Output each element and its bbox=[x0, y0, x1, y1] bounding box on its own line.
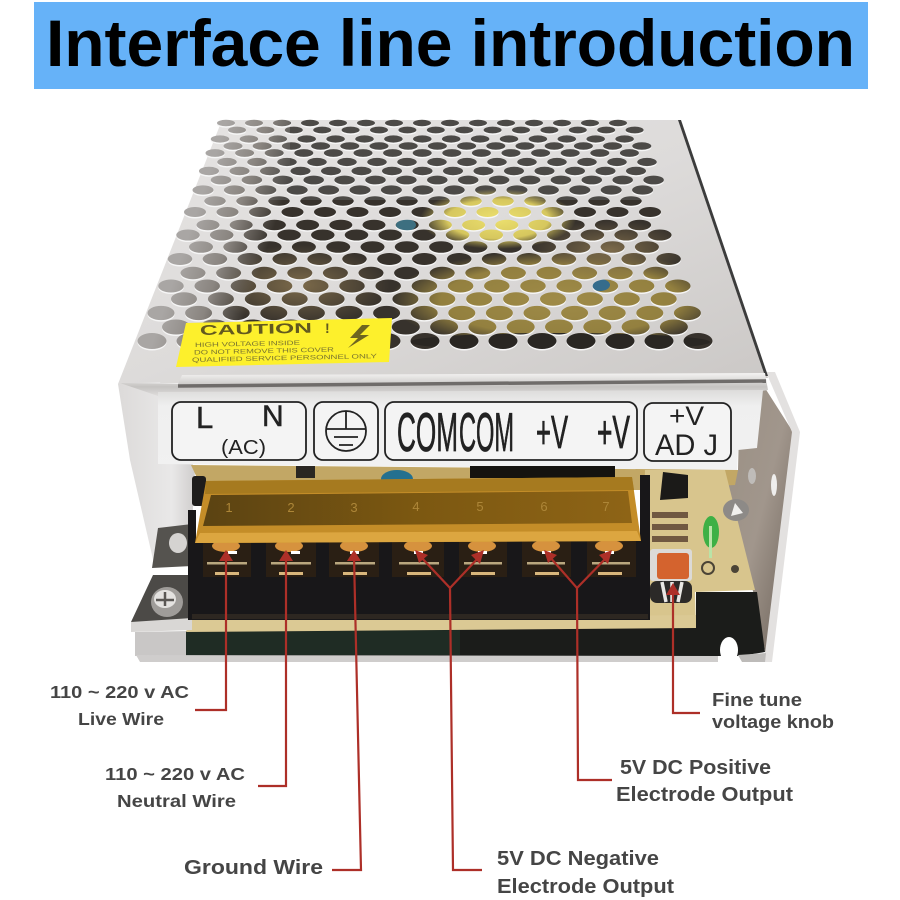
red pointer lines and arrows bbox=[195, 550, 700, 870]
panel: white terminal label strip bbox=[158, 390, 763, 470]
arrow: neutral wire bbox=[258, 550, 293, 786]
L N AC box: N bbox=[262, 400, 284, 433]
hole rim highlights bbox=[152, 124, 702, 342]
caution sticker: QUALIFIED SERVICE PERSONNEL ONLY bbox=[192, 353, 378, 364]
label: fine tune knob bbox=[712, 690, 834, 732]
title banner: Interface line introduction bbox=[46, 6, 855, 80]
panel: left side metal bbox=[118, 382, 195, 568]
label: live wire: Live Wire bbox=[78, 709, 164, 729]
perforation holes bbox=[138, 120, 712, 349]
+V ADJ box: +V bbox=[669, 401, 704, 431]
caution sticker: DO NOT REMOVE THIS COVER bbox=[194, 347, 335, 356]
label: live wire bbox=[50, 682, 189, 729]
amber terminal cover with numbers: 2 bbox=[287, 500, 295, 515]
panel: perforated top cover bbox=[118, 110, 768, 384]
amber terminal cover with numbers: 7 bbox=[602, 499, 610, 514]
COM and +V box: COM bbox=[459, 401, 514, 463]
COM and +V box: +V bbox=[597, 406, 630, 458]
transistor bbox=[660, 472, 688, 500]
amber terminal cover with numbers: 6 bbox=[540, 499, 548, 514]
arrow: positive output bbox=[544, 550, 612, 780]
label: live wire: 110 ~ 220 v AC bbox=[50, 682, 189, 702]
notch in base bbox=[720, 637, 738, 663]
black terminal block bbox=[188, 475, 650, 620]
ground symbol box bbox=[314, 402, 378, 460]
arrow: negative output bbox=[415, 550, 484, 870]
caution sticker: ! bbox=[325, 320, 330, 336]
label: fine tune knob: voltage knob bbox=[712, 712, 834, 732]
caution sticker: CAUTION bbox=[200, 320, 312, 338]
panel: right side wall bbox=[725, 372, 800, 662]
amber terminal cover with numbers: 3 bbox=[350, 500, 358, 515]
label: fine tune knob: Fine tune bbox=[712, 690, 802, 710]
L N AC box bbox=[172, 400, 306, 460]
caution sticker bbox=[176, 318, 392, 367]
label: positive output: 5V DC Positive bbox=[620, 756, 771, 779]
label: neutral wire: 110 ~ 220 v AC bbox=[105, 764, 245, 784]
L N AC box: L bbox=[196, 400, 213, 435]
screw terminals bbox=[203, 541, 636, 577]
bottom base plate bbox=[135, 592, 766, 663]
green LED bbox=[702, 516, 739, 574]
label: neutral wire bbox=[105, 764, 245, 811]
label: negative output bbox=[497, 847, 674, 898]
COM and +V box bbox=[385, 401, 637, 463]
COM and +V box: COM bbox=[397, 401, 458, 463]
amber terminal cover with numbers: 5 bbox=[476, 499, 484, 514]
arrow: voltage knob bbox=[666, 583, 700, 713]
amber terminal cover with numbers bbox=[195, 477, 641, 543]
caution sticker: HIGH VOLTAGE INSIDE bbox=[195, 340, 300, 349]
label: positive output bbox=[616, 756, 793, 806]
label: negative output: Electrode Output bbox=[497, 875, 674, 898]
label: neutral wire: Neutral Wire bbox=[117, 791, 236, 811]
arrow: ground wire bbox=[332, 550, 361, 870]
label: positive output: Electrode Output bbox=[616, 783, 793, 806]
arrow: live wire bbox=[195, 550, 233, 710]
amber terminal cover with numbers: 4 bbox=[412, 499, 420, 514]
+V ADJ box: AD J bbox=[655, 429, 718, 462]
COM and +V box: +V bbox=[536, 406, 568, 458]
left mounting brackets with screw bbox=[131, 524, 192, 632]
orange adjust knob bbox=[650, 549, 692, 603]
cream PCB strip bbox=[186, 615, 696, 632]
mounting screw bbox=[723, 468, 777, 521]
label: negative output: 5V DC Negative bbox=[497, 847, 659, 870]
label: ground wire: Ground Wire bbox=[184, 856, 323, 879]
circuit board behind terminals bbox=[191, 465, 738, 495]
resistors bbox=[652, 515, 688, 539]
right circuit board with components bbox=[640, 468, 777, 628]
callout labels bbox=[50, 682, 834, 898]
amber terminal cover with numbers: 1 bbox=[225, 500, 233, 515]
power supply product photo bbox=[118, 110, 800, 663]
L N AC box: (AC) bbox=[221, 437, 266, 459]
front lip of cover bbox=[120, 373, 768, 396]
+V ADJ box bbox=[644, 401, 731, 462]
